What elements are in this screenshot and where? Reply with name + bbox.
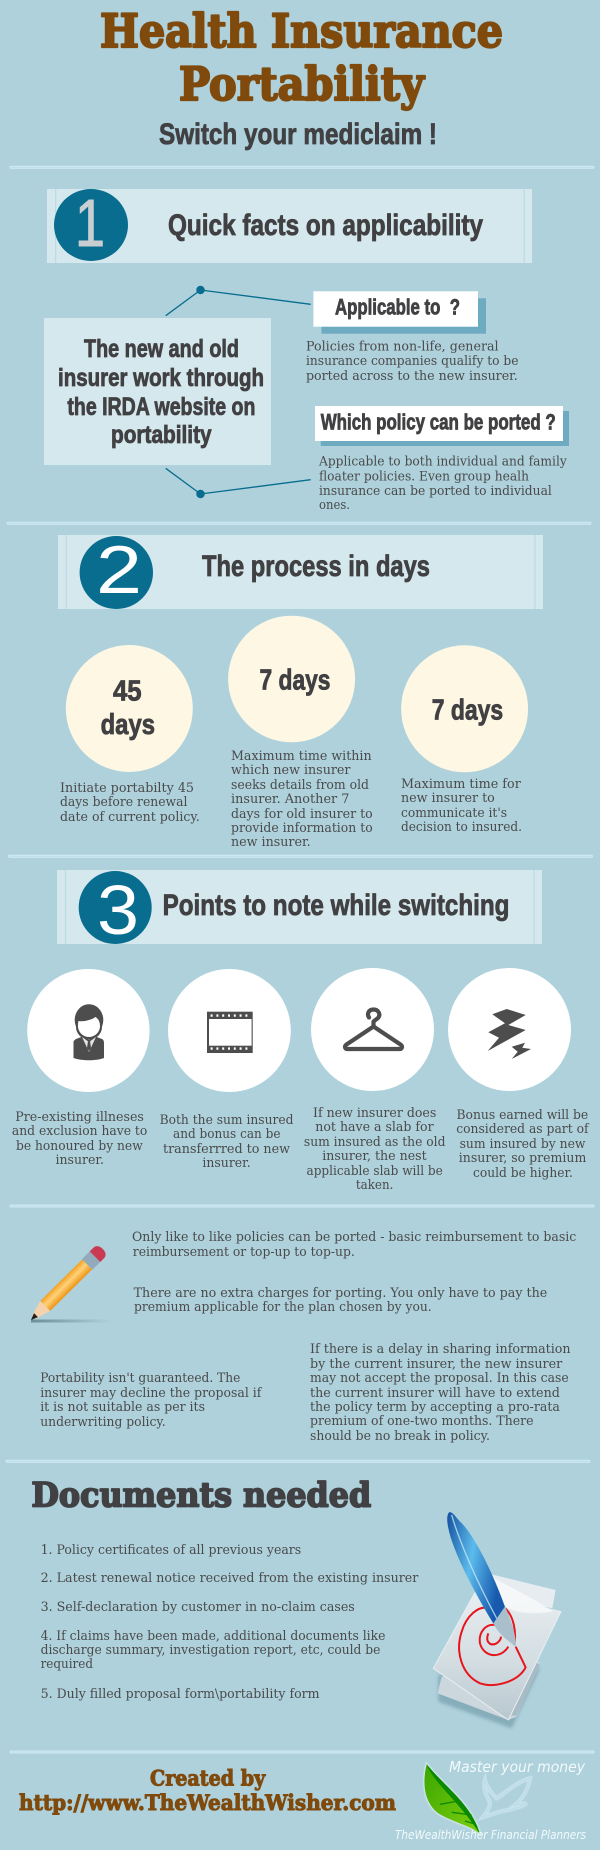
list: documents — [41, 1543, 419, 1702]
point: slab for sum insured — [304, 968, 446, 1193]
stat: 7 days communicate — [401, 645, 528, 772]
icon: lightning bolts — [488, 1009, 531, 1059]
point: pre-existing illnesses: Pre-existing illneses — [15, 1110, 144, 1125]
list: documents: 4. If claims have been made, additional documents like — [41, 1629, 386, 1644]
point: bonus earned: sum insured by new — [460, 1137, 586, 1152]
text: like to like — [132, 1230, 576, 1260]
panel: IRDA website statement: portability — [111, 421, 212, 449]
icon: hanger — [345, 1010, 402, 1049]
point: slab for sum insured: insurer, the nest — [322, 1149, 427, 1164]
heading: documents needed: Documents needed — [31, 1476, 371, 1516]
text: portability not guaranteed: Portability isn't guaranteed. The — [40, 1371, 241, 1386]
text: like to like: reimbursement or top-up to top-up. — [133, 1245, 355, 1260]
text: 7 days seek details description — [231, 749, 373, 850]
text: which policy answer: floater policies. Even group healh — [319, 470, 530, 485]
text: 7 days communicate description: new insurer to — [401, 791, 495, 806]
point: pre-existing illnesses — [12, 969, 150, 1168]
list: documents: 3. Self-declaration by customer in no-claim cases — [41, 1600, 355, 1615]
point: slab for sum insured: If new insurer does — [313, 1106, 436, 1121]
logo: TheWealthWisher: Master your money — [449, 1758, 586, 1776]
point: sum insured and bonus — [160, 969, 294, 1171]
banner: section 1: 1 — [75, 186, 105, 261]
point: bonus earned: could be higher. — [473, 1166, 573, 1181]
point: sum insured and bonus: Both the sum insured — [160, 1113, 294, 1128]
banner: section 2 — [58, 532, 543, 609]
text: 45 days description: date of current policy. — [60, 810, 200, 825]
panel: IRDA website statement: The new and old — [84, 335, 239, 363]
point: sum insured and bonus: transferrred to new — [163, 1142, 290, 1157]
icon: leaf — [424, 1764, 480, 1834]
banner: section 3: 3 — [97, 871, 139, 949]
point: sum insured and bonus: insurer. — [202, 1156, 251, 1171]
list: documents: 5. Duly filled proposal form\portability form — [41, 1687, 320, 1702]
point: bonus earned: Bonus earned will be — [456, 1108, 588, 1123]
stat: 45 days: 45 — [113, 676, 142, 708]
point: slab for sum insured: taken. — [356, 1178, 393, 1193]
text: 7 days seek details description: which new insurer — [231, 763, 351, 778]
banner: section 3: Points to note while switching — [163, 889, 509, 922]
title: Portability — [179, 57, 425, 111]
panel: IRDA website statement — [44, 318, 271, 465]
text: delay in sharing information: should be no break in policy. — [310, 1429, 490, 1444]
text: delay in sharing information: the current insurer will have to extend — [310, 1386, 560, 1401]
subtitle: Switch your mediclaim ! — [159, 118, 437, 151]
text: 45 days description: Initiate portabilty 45 — [60, 781, 194, 796]
point: pre-existing illnesses: and exclusion have to — [12, 1124, 147, 1139]
point: bonus earned — [448, 968, 590, 1181]
point: sum insured and bonus: and bonus can be — [173, 1127, 281, 1142]
point: slab for sum insured: applicable slab will be — [306, 1164, 443, 1179]
text: delay in sharing information: may not accept the proposal. In this case — [310, 1371, 569, 1386]
text: which policy answer: ones. — [319, 498, 350, 513]
stat: 7 days seek details: 7 days — [260, 664, 330, 696]
text: portability not guaranteed — [40, 1371, 263, 1430]
list: documents: discharge summary, investigation report, etc, could be — [41, 1643, 381, 1658]
text: 45 days description — [60, 781, 200, 825]
panel: IRDA website statement: the IRDA website on — [67, 393, 255, 421]
footer: created by: Created by — [150, 1766, 266, 1791]
list: documents: 2. Latest renewal notice received from the existing insurer — [41, 1571, 419, 1586]
icon: bird outline — [483, 1778, 530, 1817]
text: delay in sharing information: the policy term by accepting a pro-rata — [310, 1400, 560, 1415]
panel: IRDA website statement: insurer work through — [58, 364, 264, 392]
title — [100, 4, 503, 111]
text: 7 days seek details description: Maximum time within — [231, 749, 372, 764]
point: slab for sum insured: sum insured as the old — [304, 1135, 446, 1150]
banner: section 2: 2 — [96, 532, 142, 608]
point: pre-existing illnesses: insurer. — [56, 1153, 104, 1168]
text: applicable to answer: insurance companies qualify to be — [306, 354, 519, 369]
text: 7 days communicate description: decision to insured. — [401, 820, 522, 835]
text: delay in sharing information: If there is a delay in sharing information — [310, 1342, 571, 1357]
text: 7 days seek details description: insurer. Another 7 — [231, 792, 349, 807]
text: 7 days communicate description: communicate it's — [401, 806, 507, 821]
stat: 45 days — [66, 645, 193, 772]
banner: section 1 — [47, 186, 532, 263]
section 1: quick facts — [44, 186, 569, 513]
banner: section 1: Quick facts on applicability — [168, 209, 483, 242]
point: bonus earned: insurer, so premium — [459, 1151, 586, 1166]
text: 7 days seek details description: new insurer. — [231, 835, 311, 850]
callout: applicable to — [313, 291, 486, 334]
connector lines — [166, 286, 311, 498]
point: slab for sum insured: not have a slab for — [315, 1120, 434, 1135]
text: portability not guaranteed: underwriting policy. — [40, 1415, 166, 1430]
text: applicable to answer: ported across to the new insurer. — [306, 369, 518, 384]
text: 7 days seek details description: provide information to — [231, 821, 373, 836]
text: 7 days communicate description — [401, 777, 522, 835]
footer: created by — [19, 1766, 396, 1815]
text: which policy answer: Applicable to both individual and family — [318, 455, 567, 470]
icon: person — [74, 1004, 104, 1060]
callout: which policy can be ported — [315, 406, 569, 446]
footer: created by: http://www.TheWealthWisher.com — [19, 1790, 396, 1815]
title: Health Insurance — [100, 4, 503, 58]
text: which policy answer — [318, 455, 567, 513]
text: portability not guaranteed: insurer may decline the proposal if — [40, 1386, 263, 1401]
section 3: points to note — [12, 870, 590, 1193]
banner: section 2: The process in days — [202, 550, 430, 583]
icon: pencil — [26, 1244, 111, 1325]
stat: 7 days seek details — [228, 616, 355, 742]
text: delay in sharing information — [310, 1342, 571, 1444]
text: which policy answer: insurance can be ported to individual — [319, 484, 552, 499]
illustration: pen and documents — [433, 1512, 561, 1728]
text: applicable to answer — [306, 340, 519, 384]
text: 7 days seek details description: seeks details from old — [231, 778, 369, 793]
text: no extra charges: premium applicable for the plan chosen by you. — [134, 1300, 432, 1315]
text: like to like: Only like to like policies can be ported - basic reimbursement to basic — [132, 1230, 576, 1245]
logo: TheWealthWisher — [395, 1758, 586, 1842]
list: documents: required — [41, 1657, 93, 1672]
text: 7 days seek details description: days for old insurer to — [231, 807, 373, 822]
point: bonus earned: considered as part of — [456, 1122, 590, 1137]
text: portability not guaranteed: it is not suitable as per its — [40, 1400, 205, 1415]
text: delay in sharing information: by the current insurer, the new insurer — [310, 1357, 563, 1372]
point: pre-existing illnesses: be honoured by new — [16, 1139, 143, 1154]
stat: 7 days communicate: 7 days — [432, 694, 503, 726]
text: no extra charges — [134, 1286, 548, 1315]
banner: section 3 — [57, 870, 542, 949]
text: 45 days description: days before renewal — [60, 795, 188, 810]
callout: applicable to: Applicable to ? — [335, 295, 460, 320]
list: documents: 1. Policy certificates of all previous years — [41, 1543, 301, 1558]
icon: film strip — [207, 1012, 253, 1053]
section 2: process in days — [58, 532, 543, 850]
stat: 45 days: days — [101, 709, 155, 741]
text: no extra charges: There are no extra charges for porting. You only have to pay the — [134, 1286, 548, 1301]
text: 7 days communicate description: Maximum time for — [401, 777, 522, 792]
text: delay in sharing information: premium of one-two months. There — [310, 1414, 534, 1429]
text: applicable to answer: Policies from non-life, general — [306, 340, 499, 355]
